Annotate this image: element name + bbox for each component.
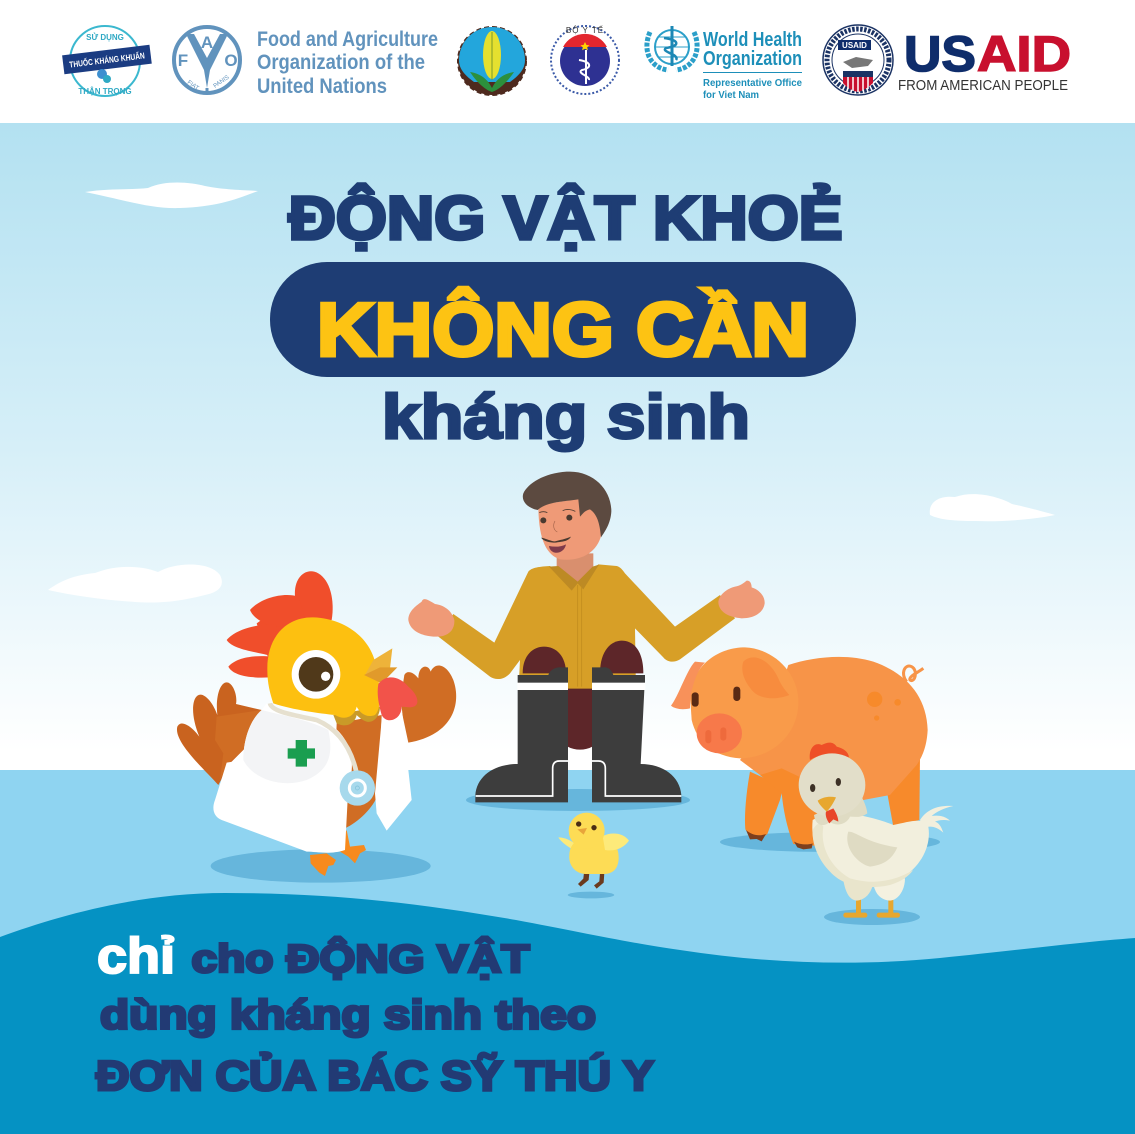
placket [578, 585, 582, 687]
spots [867, 692, 901, 721]
eyes [576, 821, 597, 830]
logo: USAID seal: USAID [842, 41, 867, 50]
beak [577, 828, 587, 835]
snout [697, 713, 742, 753]
body [333, 715, 382, 828]
logo: FAO: O [224, 51, 238, 70]
logo: antibiotics campaign stamp [62, 26, 152, 96]
word: chỉ: chỉ [97, 928, 175, 984]
cloud left [48, 564, 222, 603]
thighs [843, 880, 873, 901]
logo: FAO: FIAT [186, 80, 200, 92]
logo text: USAID wordmark [898, 26, 1071, 94]
stethoscope [270, 703, 375, 806]
logo text: Food and Agriculture Organization of the United Nations: United Nations [257, 75, 387, 98]
logo: FAO: F [178, 51, 188, 70]
bottom message [96, 928, 654, 1099]
neck [557, 553, 593, 583]
legs and feet [310, 830, 366, 876]
comb [810, 743, 849, 760]
hen [799, 743, 953, 918]
body [569, 836, 619, 874]
wing [847, 832, 897, 867]
right knee [600, 641, 643, 673]
left hand [408, 599, 454, 637]
ear right [742, 657, 789, 698]
body [812, 814, 929, 885]
shadow [568, 892, 614, 898]
far leg [745, 772, 783, 837]
sea ground [0, 770, 1135, 1134]
wattle [378, 677, 417, 720]
front wing [400, 665, 456, 743]
breast shade [813, 824, 913, 887]
right wing [603, 833, 629, 850]
pig tail [904, 666, 923, 682]
hair [523, 472, 611, 537]
tail feathers [920, 806, 953, 833]
logo text: World Health Organization [703, 29, 802, 101]
logo: ministry of health [551, 25, 619, 94]
logo: ministry of agriculture [458, 27, 526, 95]
chick [558, 813, 629, 898]
collar [549, 565, 599, 591]
right boot [592, 667, 681, 802]
eyes [692, 687, 740, 707]
moustache and mouth [541, 537, 571, 553]
cloud top left [85, 182, 258, 208]
coat lapel [375, 707, 412, 831]
logo: FAO: A [201, 33, 213, 52]
neck [814, 793, 867, 825]
far back leg [880, 753, 920, 827]
legs [843, 898, 900, 918]
logo: ministry of health: BỘ Y TẾ [566, 25, 604, 35]
left boot [475, 667, 568, 802]
rooster doctor [177, 571, 456, 883]
logo: antibiotics campaign stamp: THẬN TRỌNG [78, 87, 132, 96]
title pill: KHÔNG CẦN [317, 287, 809, 371]
title line 1: ĐỘNG VẬT KHOẺ [288, 184, 842, 252]
right hand [718, 581, 765, 618]
eye [292, 650, 340, 699]
logo text: USAID wordmark: US [904, 26, 976, 82]
man shadow [466, 789, 690, 811]
face [538, 498, 602, 560]
sky background [0, 123, 1135, 771]
logo: FAO: PANIS [213, 75, 231, 90]
logo text: Food and Agriculture Organization of the United Nations [257, 28, 438, 98]
logo text: USAID wordmark: FROM AMERICAN PEOPLE [898, 77, 1068, 94]
text: đơn của bác sỹ thú y: ĐƠN CỦA BÁC SỸ THÚ Y [96, 1051, 654, 1099]
comb [227, 571, 333, 678]
near leg [760, 768, 827, 847]
hen shadow [824, 909, 920, 925]
title pill [270, 262, 856, 377]
logo: WHO emblem [647, 26, 697, 70]
logo: USAID seal [823, 25, 893, 95]
head [690, 647, 798, 758]
head [799, 753, 865, 817]
shadow [211, 849, 431, 883]
green cross [288, 740, 315, 767]
text: dùng kháng sinh theo: dùng kháng sinh theo [100, 992, 596, 1038]
beak [818, 797, 836, 812]
bottom wave [0, 893, 1135, 1134]
doctor coat [213, 703, 352, 853]
ear left [671, 662, 705, 709]
left wing [558, 837, 577, 850]
back wing [177, 682, 262, 785]
head [569, 813, 605, 849]
head [267, 617, 380, 718]
legs [578, 873, 604, 889]
title line 3: kháng sinh [382, 382, 750, 452]
eyes and brows [539, 509, 575, 532]
text: cho động vật: cho ĐỘNG VẬT [192, 936, 530, 981]
beak [364, 648, 397, 683]
cloud right [930, 494, 1055, 521]
logo text: Food and Agriculture Organization of the United Nations: Food and Agriculture [257, 28, 438, 51]
neck scallop [333, 707, 380, 725]
logo text: World Health Organization: for Viet Nam [703, 89, 759, 101]
body [740, 657, 928, 802]
pig [671, 647, 928, 849]
shirt and arms [438, 564, 735, 693]
left knee [523, 647, 566, 673]
trousers [568, 689, 592, 750]
pig shadow [720, 832, 940, 852]
header logo bar [0, 0, 1135, 123]
coat inner shade [243, 710, 330, 783]
hoof [746, 830, 766, 841]
logo text: Food and Agriculture Organization of the United Nations: Organization of the [257, 51, 425, 74]
logo text: World Health Organization: Organization [703, 48, 802, 70]
logo text: World Health Organization: World Health [703, 29, 802, 51]
logo text: World Health Organization: Representative Office [703, 77, 802, 89]
hoof [794, 842, 813, 849]
logo text: USAID wordmark: AID [977, 26, 1071, 82]
logo: FAO [174, 27, 240, 94]
logo: antibiotics campaign stamp: THUỐC KHÁNG KHUẨN [69, 49, 145, 70]
eyes [810, 778, 841, 792]
wattle [826, 808, 838, 823]
man character [408, 472, 765, 802]
logo: antibiotics campaign stamp: SỬ DỤNG [86, 33, 124, 42]
